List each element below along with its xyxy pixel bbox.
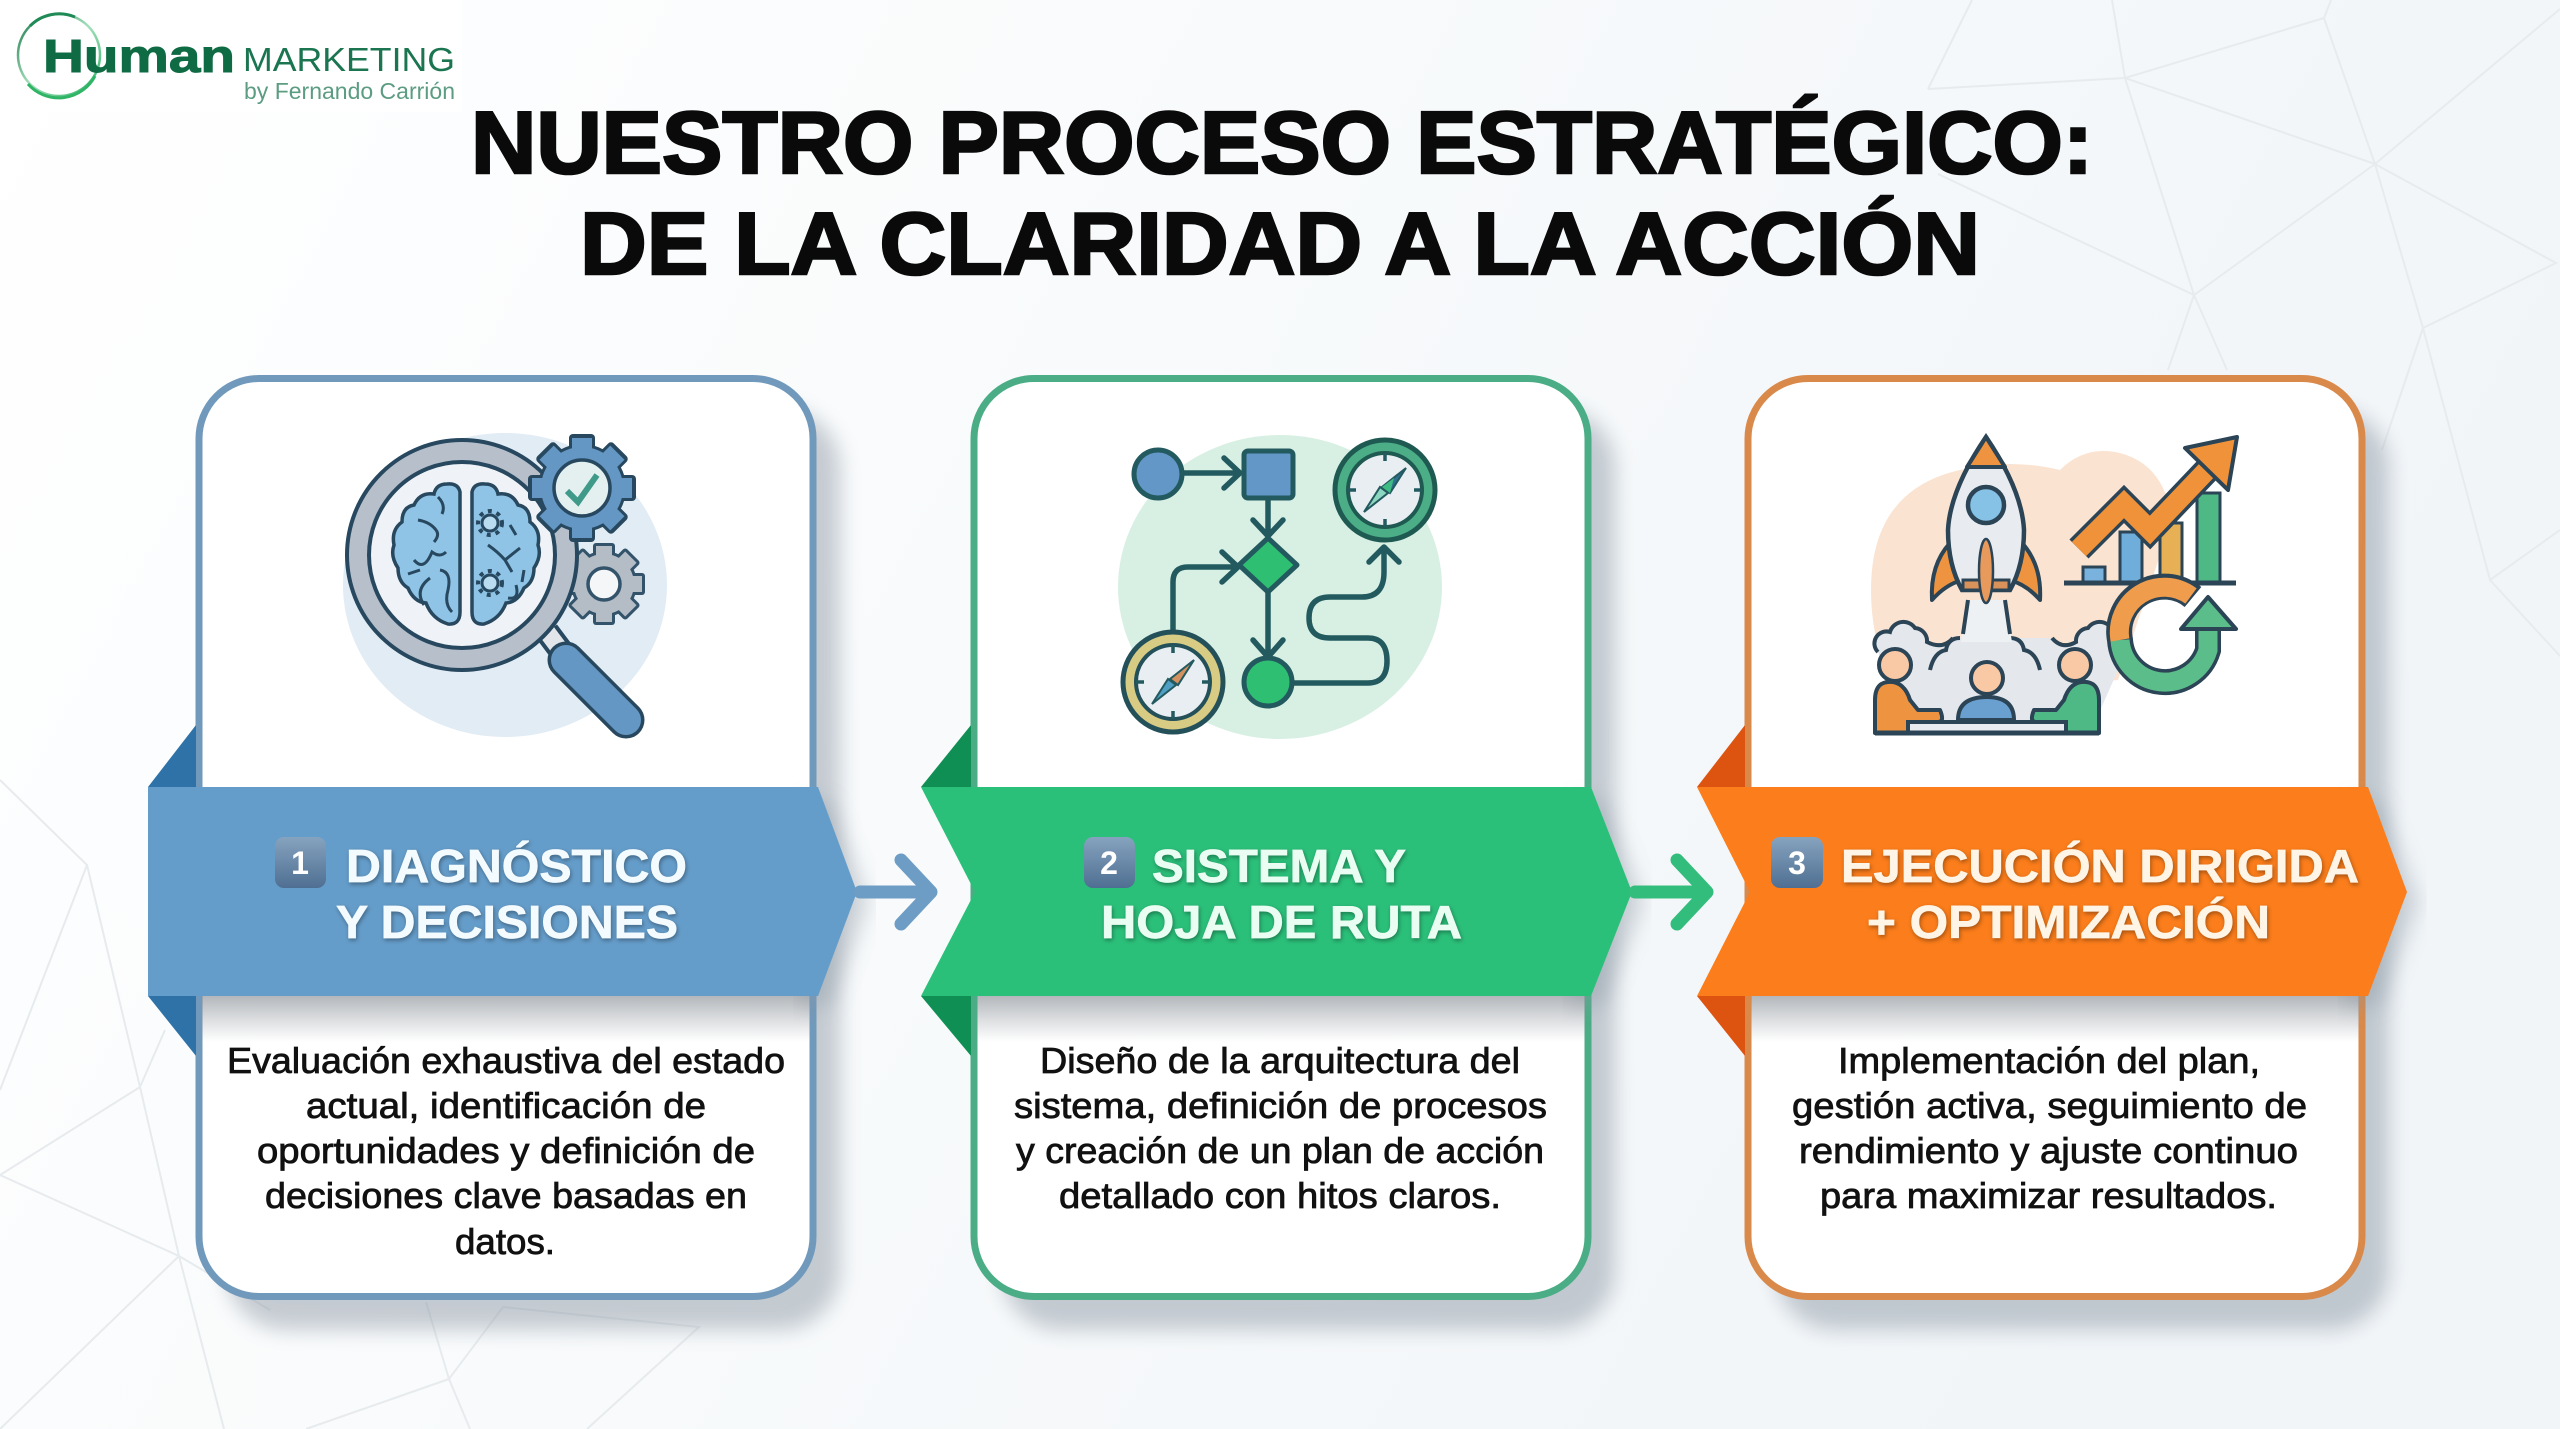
ribbon 2 [921,787,1632,996]
arrow 2 to 3 [1635,860,1707,924]
icon: rocket team chart and cycle [1871,437,2237,733]
panel: step 2 sistema [921,378,1644,1330]
body text 3: para maximizar resultados. [1820,1175,2277,1216]
heading 3: EJECUCIÓN DIRIGIDA [1841,840,2359,892]
body text 3: gestión activa, seguimiento de [1792,1085,2307,1126]
card 1 [199,378,813,1296]
body text 1: Evaluación exhaustiva del estado [227,1040,785,1081]
body text 2: y creación de un plan de acción [1016,1130,1544,1171]
heading 2: SISTEMA Y [1152,840,1406,892]
ribbon fold bottom 1 [148,996,196,1056]
badge 1: 1 [291,845,309,881]
heading 3: + OPTIMIZACIÓN [1867,896,2270,948]
body text 2 [1014,1040,1547,1216]
body text 3 [1792,1040,2307,1216]
body text 1: oportunidades y definición de [257,1130,755,1171]
logo: Human Marketing by Fernando Carrión [0,0,462,112]
badge 2: 2 [1100,845,1118,881]
ribbon fold top 1 [148,725,196,787]
body text 1: datos. [455,1221,555,1262]
logo: Human Marketing by Fernando Carrión: MARKETING [243,41,455,78]
badge 2 [1084,837,1135,888]
ribbon fold bottom 3 [1697,996,1745,1056]
logo: Human Marketing by Fernando Carrión: by Fernando Carrión [244,78,455,104]
badge 3: 3 [1788,845,1806,881]
body text 1 [227,1040,785,1262]
badge 1 [275,837,326,888]
icon: cycle arrow [2119,587,2236,682]
body text 2: sistema, definición de procesos [1014,1085,1547,1126]
body text 1: decisiones clave basadas en [265,1175,747,1216]
heading 1 [336,840,687,948]
heading 3 [1841,840,2359,948]
heading 2 [1101,840,1462,948]
card 3 [1748,378,2362,1296]
heading 1: DIAGNÓSTICO [346,840,687,892]
heading 1: Y DECISIONES [336,896,678,948]
title [471,93,2093,293]
card 2 [974,378,1588,1296]
title: NUESTRO PROCESO ESTRATÉGICO: [471,93,2093,192]
body text 3: rendimiento y ajuste continuo [1799,1130,2298,1171]
ribbon fold bottom 2 [921,996,971,1056]
icon: magnifier brain and gears [343,433,667,737]
logo: Human Marketing by Fernando Carrión: Human [43,30,235,82]
ribbon 1 [148,787,857,996]
panel: step 1 diagnóstico [148,378,869,1330]
icon: flowchart and compasses [1118,435,1442,739]
body text 3: Implementación del plan, [1838,1040,2260,1081]
body text 2: Diseño de la arquitectura del [1040,1040,1520,1081]
ribbon 3 [1697,787,2407,996]
badge 3 [1771,837,1823,888]
arrow 1 to 2 [860,860,931,924]
ribbon fold top 2 [921,725,971,787]
heading 2: HOJA DE RUTA [1101,896,1462,948]
body text 2: detallado con hitos claros. [1059,1175,1501,1216]
body text 1: actual, identificación de [306,1085,706,1126]
panel: step 3 ejecución [1697,378,2419,1330]
ribbon fold top 3 [1697,725,1745,787]
title: DE LA CLARIDAD A LA ACCIÓN [580,194,1980,293]
bar chart with growth arrow [2064,437,2237,583]
